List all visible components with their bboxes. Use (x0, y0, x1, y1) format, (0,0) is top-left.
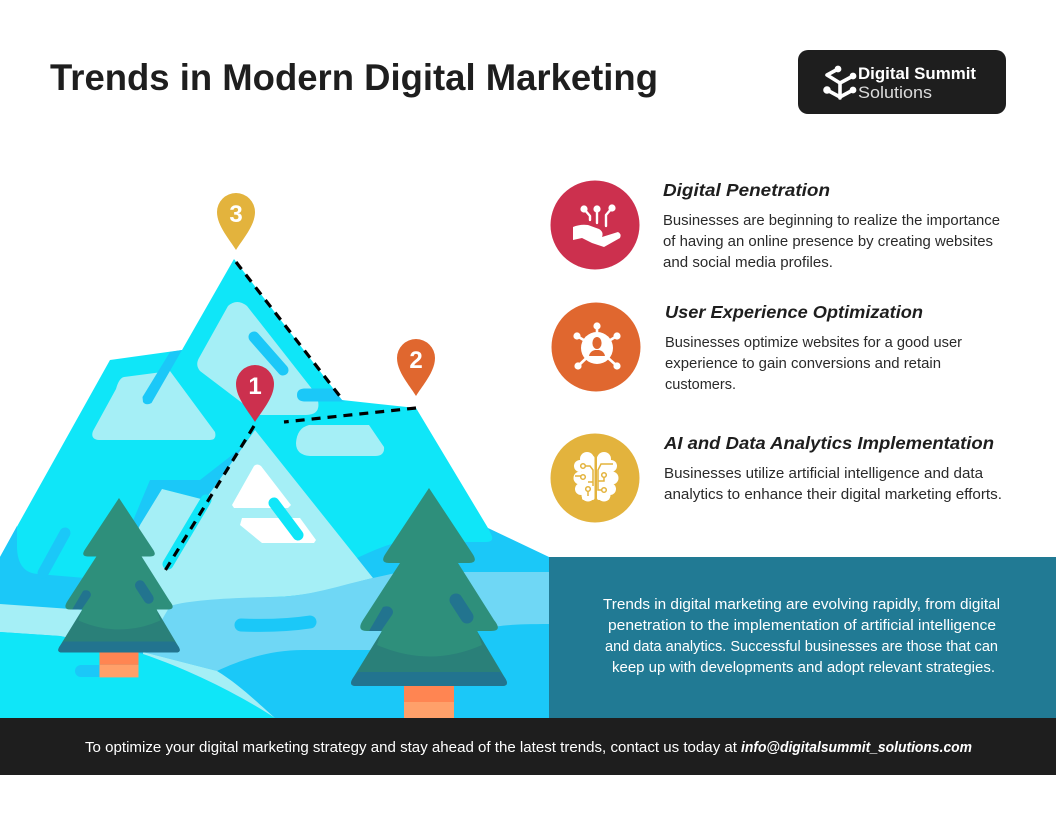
cyan stripe on white snow (274, 503, 298, 535)
text block: experience to gain conversions and retain (665, 356, 941, 372)
ridge shadow (125, 430, 255, 540)
pin 2 (397, 339, 435, 396)
footer text: To optimize your digital marketing strategy and stay ahead of the latest trends, contact us today at (85, 740, 737, 756)
logo badge (798, 50, 1006, 114)
icon: logo mark (825, 67, 855, 98)
summary text (603, 597, 1000, 676)
logo text: Solutions (858, 83, 932, 102)
pin 1 (236, 365, 274, 422)
icon: circuit brain (550, 434, 640, 522)
mid blue band (143, 572, 549, 671)
mountain illustration (0, 259, 549, 718)
text block: of having an online presence by creating websites (663, 234, 993, 250)
text block: Businesses utilize artificial intelligence and data (664, 466, 984, 482)
text block: Businesses are beginning to realize the importance (663, 213, 1000, 229)
large tree (351, 488, 507, 718)
text block (664, 466, 1002, 503)
main cyan mountain (0, 259, 492, 610)
white snow caps (232, 464, 291, 508)
item 1: digital penetration (550, 180, 1000, 271)
title: Trends in Modern Digital Marketing (50, 57, 658, 98)
pin 1: 1 (248, 373, 262, 400)
light wedge (143, 652, 275, 718)
blue stripe by small tree (81, 665, 105, 677)
text block (665, 335, 962, 393)
summary text: penetration to the implementation of artificial intelligence (608, 618, 996, 634)
logo text: Digital Summit (858, 64, 976, 83)
panel: summary (549, 557, 1056, 718)
item 3: AI and data analytics (550, 433, 1002, 522)
icon: hand with circuits (550, 180, 640, 270)
item 2: user experience (552, 302, 962, 393)
pin 3: 3 (229, 201, 243, 228)
text block: customers. (665, 377, 736, 393)
summary text: keep up with developments and adopt relevant strategies. (612, 660, 995, 676)
snow: right (296, 425, 384, 456)
footer text: info@digitalsummit_solutions.com (741, 740, 972, 756)
heading: AI and Data Analytics Implementation (663, 433, 994, 453)
stripe: left (43, 533, 65, 573)
summary text: and data analytics. Successful businesses are those that can (605, 639, 998, 655)
left shadow (0, 526, 85, 612)
stripe in band (241, 622, 310, 625)
summary text: Trends in digital marketing are evolving rapidly, from digital (603, 597, 1000, 613)
heading: Digital Penetration (663, 180, 830, 200)
pin 2: 2 (409, 347, 423, 374)
dashed route (163, 262, 416, 574)
dark blue ground (0, 528, 549, 718)
snow: upper left (92, 371, 215, 440)
heading: User Experience Optimization (665, 302, 923, 322)
footer bar (0, 718, 1056, 775)
front snowy mountain (100, 430, 373, 612)
text block: analytics to enhance their digital marketing efforts. (664, 487, 1002, 503)
small tree (58, 498, 180, 677)
text block: Businesses optimize websites for a good user (665, 335, 962, 351)
pin 3 (217, 193, 255, 250)
snow: upper peak (197, 302, 318, 415)
light left band (0, 604, 175, 652)
cyan ridge stripe (168, 500, 206, 564)
stripes on snow (142, 337, 345, 404)
text block: and social media profiles. (663, 255, 833, 271)
text block (663, 213, 1000, 271)
icon: user network (552, 302, 640, 392)
cyan base (0, 632, 275, 718)
logo text (858, 64, 976, 102)
